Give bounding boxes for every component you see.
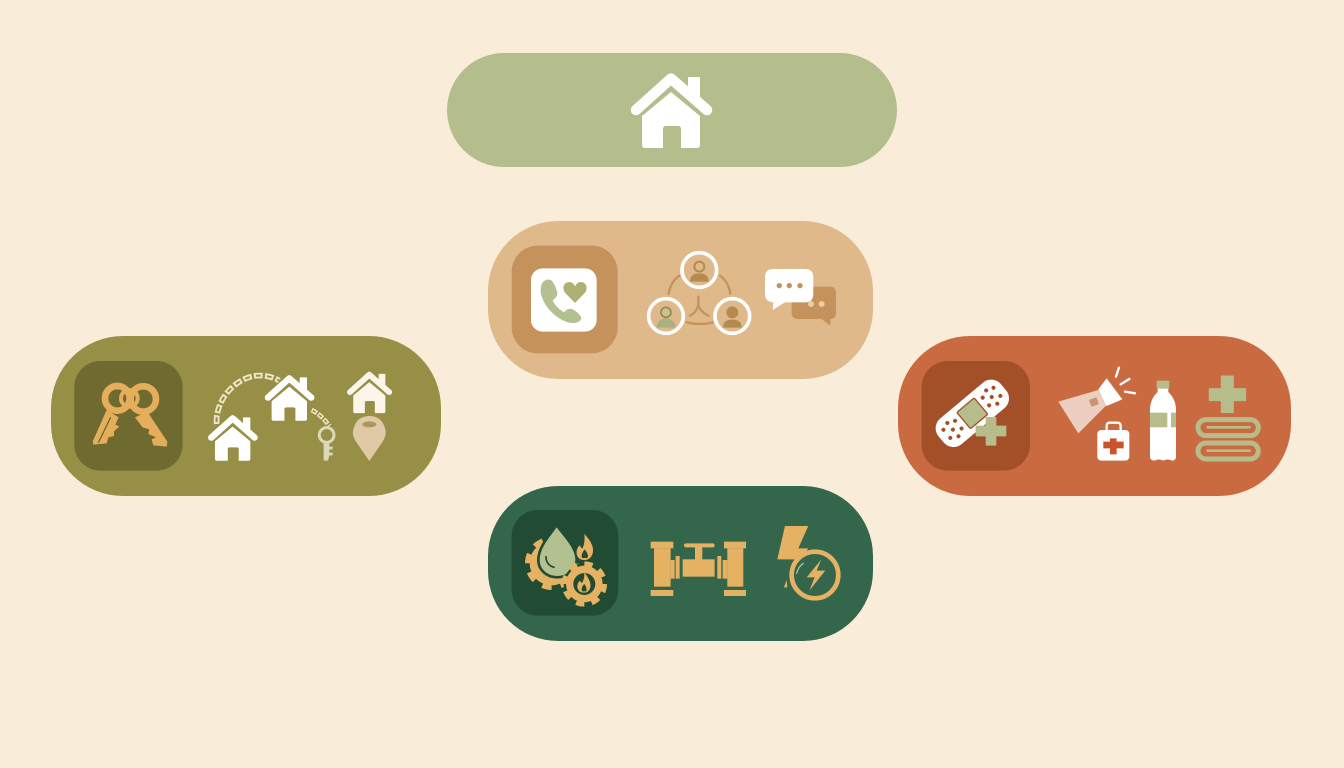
panel: utilities — [488, 486, 873, 641]
panel: emergency kit — [898, 336, 1291, 496]
icon: pipe with valve — [651, 542, 746, 596]
icon: support network — [649, 253, 750, 333]
panel: keys and neighbours — [51, 336, 441, 496]
icon: house — [636, 77, 707, 148]
icon: first aid kit — [1097, 423, 1129, 461]
icon: water bottle — [1150, 381, 1176, 461]
panel: home — [447, 53, 897, 167]
icon: phone with heart — [512, 246, 618, 353]
icon: flashlight — [1058, 368, 1135, 433]
icon: electricity — [777, 526, 840, 600]
icon: water, gas and gears — [512, 510, 618, 616]
icon: house with location pin — [350, 374, 389, 461]
icon: chat bubbles — [765, 269, 836, 326]
panel: contacts and communication — [488, 221, 873, 379]
icon: blankets and plus — [1198, 376, 1258, 459]
icon: houses linked by chain — [211, 376, 334, 461]
icon: bandage and plus — [922, 361, 1030, 471]
icon: pair of keys — [74, 361, 183, 471]
